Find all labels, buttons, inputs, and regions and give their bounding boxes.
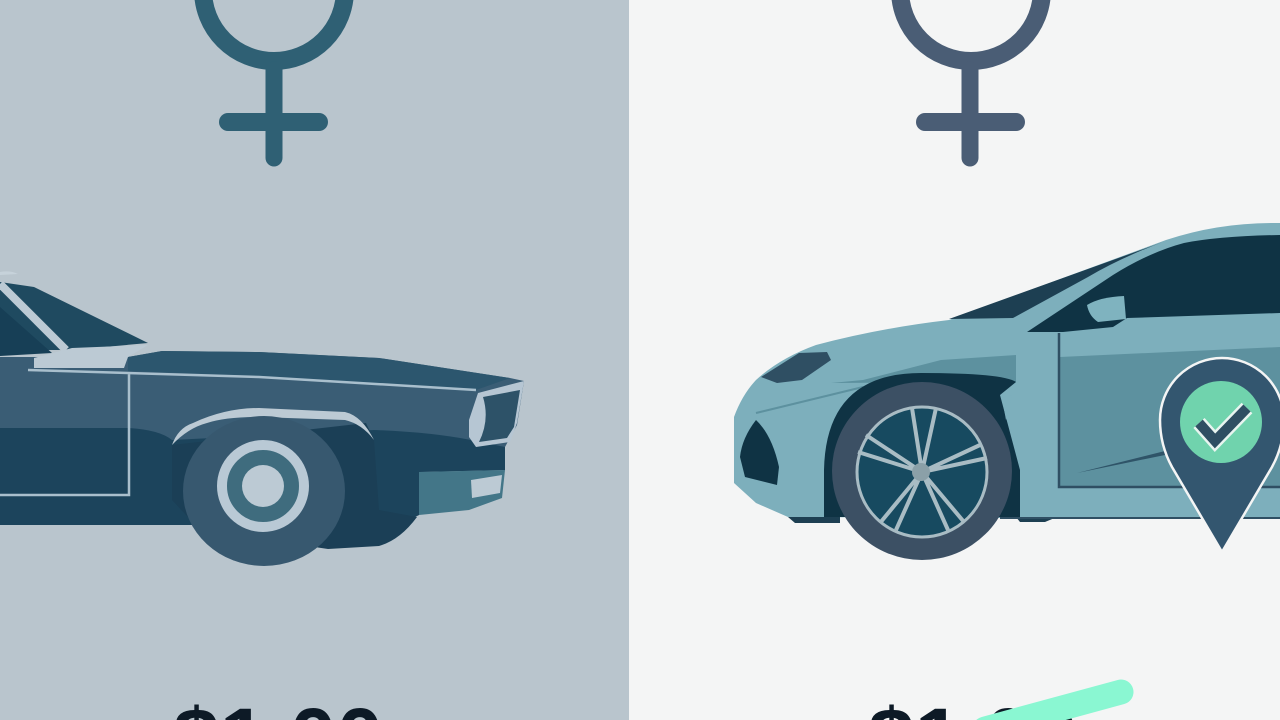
wheel arch — [824, 373, 1020, 517]
door — [1060, 347, 1280, 486]
illustration: modern car — [734, 223, 1280, 560]
icon: female symbol right — [900, 0, 1042, 158]
hood top band — [128, 351, 510, 390]
grille — [740, 420, 779, 485]
body lower — [0, 428, 505, 525]
panel: right background — [629, 0, 1280, 720]
icon: female symbol left — [203, 0, 345, 158]
cowl chrome — [34, 345, 148, 368]
door line — [0, 370, 476, 495]
bumper crease — [756, 387, 863, 413]
wheel — [832, 382, 1012, 560]
swoosh highlight — [985, 692, 1121, 720]
bumper — [419, 470, 505, 515]
headlight — [469, 381, 524, 447]
body — [734, 223, 1280, 518]
side window — [1027, 235, 1280, 332]
panel: left background — [0, 0, 629, 720]
underbody shadows — [788, 517, 840, 523]
wheel — [183, 416, 345, 566]
fender panel — [831, 355, 1016, 383]
illustration: classic car — [0, 271, 524, 566]
windshield strip — [949, 242, 1163, 319]
body upper — [0, 351, 524, 525]
wheel arch chrome — [172, 408, 374, 445]
headlight — [761, 352, 831, 383]
mirror — [1087, 296, 1126, 322]
icon: location pin with check — [1160, 358, 1280, 552]
windshield — [0, 282, 148, 350]
wheel arch shadow — [172, 423, 417, 549]
